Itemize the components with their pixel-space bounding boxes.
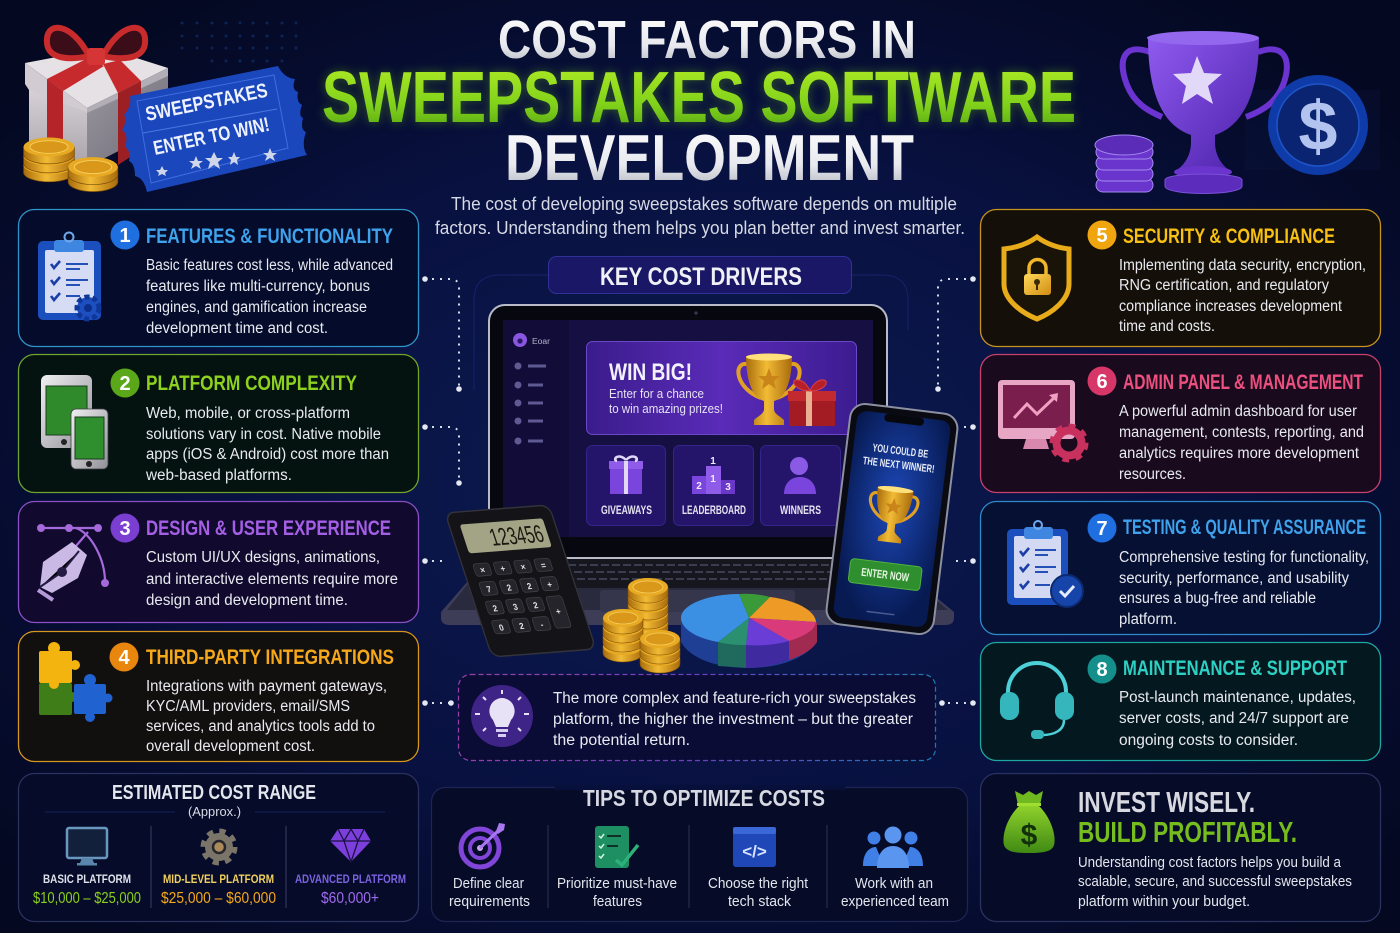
tier labels: $25,000 – $60,000 <box>161 890 276 907</box>
callout text: the potential return. <box>553 732 690 749</box>
panel: invest wisely <box>980 774 1380 922</box>
panel: third-party integrations <box>18 632 418 762</box>
heading: TIPS TO OPTIMIZE COSTS <box>583 785 825 811</box>
calculator: + <box>554 606 562 617</box>
text block: Basic features cost less, while advanced <box>146 257 393 274</box>
leaderboard tile: LEADERBOARD <box>682 505 746 517</box>
sidebar <box>513 333 550 444</box>
panel: estimated cost range: (Approx.) <box>188 804 241 819</box>
text block <box>1119 689 1356 749</box>
badge 8 <box>1088 654 1116 684</box>
tip labels: Prioritize must-have <box>557 876 677 892</box>
connectors <box>432 279 966 703</box>
text block <box>1119 403 1364 483</box>
text block: web-based platforms. <box>145 467 292 484</box>
calculator <box>445 505 596 657</box>
text block: Integrations with payment gateways, <box>146 678 387 695</box>
ticket: SWEEPSTAKES <box>144 80 270 126</box>
banner: to win amazing prizes! <box>609 402 723 416</box>
text block: Implementing data security, encryption, <box>1119 257 1366 274</box>
laptop base <box>441 557 954 625</box>
heading: key cost drivers: KEY COST DRIVERS <box>600 263 802 291</box>
tier labels: ADVANCED PLATFORM <box>295 874 406 886</box>
giveaways tile: GIVEAWAYS <box>601 505 652 517</box>
calculator: 2 <box>505 582 513 593</box>
icon: money bag <box>1003 791 1055 853</box>
text block: compliance increases development <box>1119 298 1343 315</box>
banner <box>586 342 856 434</box>
badge 1: 1 <box>119 225 131 247</box>
heading: PLATFORM COMPLEXITY <box>146 371 357 395</box>
panel: tips to optimize costs <box>432 785 968 922</box>
panel: maintenance and support <box>980 642 1380 760</box>
badge 6 <box>1088 366 1116 396</box>
title: DEVELOPMENT <box>505 121 914 194</box>
banner: WIN BIG! <box>609 359 692 386</box>
callout text <box>553 690 916 749</box>
panel: testing and quality assurance <box>980 502 1380 634</box>
icon: money bag: $ <box>1021 819 1038 852</box>
panel: security and compliance <box>980 210 1380 346</box>
icon: purple coin stack <box>1095 135 1153 192</box>
ticket: ENTER TO WIN! <box>151 114 271 160</box>
calculator: 2 <box>518 621 526 631</box>
badge 3 <box>110 514 140 542</box>
pie chart <box>681 594 817 668</box>
text block: server costs, and 24/7 support are <box>1119 710 1349 727</box>
icon: dollar coin <box>1268 75 1368 175</box>
title: COST FACTORS IN <box>498 10 916 70</box>
calculator: × <box>519 562 527 572</box>
ticket <box>122 66 307 192</box>
heading: FEATURES & FUNCTIONALITY <box>146 224 393 248</box>
tier labels: MID-LEVEL PLATFORM <box>163 874 274 886</box>
text block <box>1078 855 1352 910</box>
phone: THE NEXT WINNER! <box>862 455 935 476</box>
panel: admin panel and management <box>980 354 1380 492</box>
calculator: 7 <box>485 584 493 594</box>
tip labels: features <box>593 894 642 910</box>
badge 1 <box>110 220 140 250</box>
tier labels <box>33 874 406 907</box>
text block: platform. <box>1119 611 1177 628</box>
laptop <box>441 305 954 625</box>
badge 3: 3 <box>119 518 131 540</box>
icon: pen tool <box>37 524 109 600</box>
leaderboard tile <box>674 446 754 526</box>
badge 2: 2 <box>119 373 131 395</box>
badge 6: 6 <box>1096 371 1108 393</box>
calculator: 2 <box>491 603 499 614</box>
icon: checklist with check badge <box>1007 521 1083 607</box>
panel: design and user experience <box>18 502 418 622</box>
text block: Post-launch maintenance, updates, <box>1119 689 1356 706</box>
phone <box>825 402 959 636</box>
text block: solutions vary in cost. Native mobile <box>146 426 381 443</box>
text block: Custom UI/UX designs, animations, <box>146 549 380 566</box>
heading: INVEST WISELY. <box>1078 787 1255 819</box>
icon: phones <box>41 375 108 469</box>
tip labels: tech stack <box>728 894 792 910</box>
decorative dots and arcs <box>180 22 298 62</box>
icon: headset <box>1000 663 1074 739</box>
text block: engines, and gamification increase <box>146 299 367 316</box>
text block: Comprehensive testing for functionality, <box>1119 549 1369 566</box>
tip labels <box>449 876 949 910</box>
icon: gear <box>203 831 235 863</box>
title <box>322 10 1076 194</box>
banner: Enter for a chance <box>609 387 704 401</box>
text block <box>146 257 393 337</box>
icon: checklist <box>595 826 638 868</box>
text block: overall development cost. <box>146 738 315 755</box>
calculator: 2 <box>532 600 540 610</box>
calculator: + <box>546 579 554 590</box>
trophy illustration <box>1095 31 1368 194</box>
text block: development time and cost. <box>146 320 328 337</box>
tip labels: Choose the right <box>708 876 808 892</box>
badge 8: 8 <box>1096 659 1108 681</box>
text block <box>145 405 389 484</box>
heading: THIRD-PARTY INTEGRATIONS <box>146 645 394 669</box>
text block: resources. <box>1119 466 1186 483</box>
leaderboard tile: 3 <box>725 482 731 493</box>
winners tile <box>760 446 840 526</box>
badge 5: 5 <box>1096 225 1108 247</box>
text block: KYC/AML providers, email/SMS <box>146 698 350 715</box>
icon: people <box>863 826 923 868</box>
tier labels: $60,000+ <box>321 890 379 907</box>
icon: admin monitor with gear <box>998 380 1086 460</box>
text block <box>1119 257 1366 335</box>
calculator: 0 <box>497 622 505 633</box>
badge 4 <box>110 642 138 672</box>
panel: features and functionality <box>18 210 418 346</box>
text block: design and development time. <box>146 592 348 609</box>
badge 5 <box>1088 220 1116 250</box>
calculator: = <box>539 560 547 570</box>
calculator: 3 <box>511 602 519 612</box>
leaderboard tile: 1 <box>710 474 716 485</box>
panel: platform complexity <box>18 354 418 492</box>
icon: coin stack right <box>68 157 118 192</box>
text block: scalable, secure, and successful sweepstakes <box>1078 874 1352 890</box>
phone: YOU COULD BE <box>872 442 929 461</box>
icon: target <box>461 823 505 867</box>
heading: SECURITY & COMPLIANCE <box>1123 224 1335 248</box>
calculator: 123456 <box>486 521 548 552</box>
subtitle: factors. Understanding them helps you plan better and invest smarter. <box>435 218 965 238</box>
leaderboard tile: 2 <box>696 481 702 492</box>
text block: and interactive elements require more <box>146 571 398 588</box>
text block: platform within your budget. <box>1078 894 1250 910</box>
text block: A powerful admin dashboard for user <box>1119 403 1357 420</box>
text block: features like multi-currency, bonus <box>146 278 370 295</box>
laptop screen <box>489 305 887 558</box>
text block: services, and analytics tools add to <box>146 718 375 735</box>
tip labels: requirements <box>449 894 530 910</box>
subtitle: The cost of developing sweepstakes software depends on multiple <box>451 194 957 214</box>
sidebar: Eoar <box>532 337 550 346</box>
calculator: - <box>539 619 545 630</box>
giveaways tile <box>586 446 666 526</box>
text block: security, performance, and usability <box>1119 570 1349 587</box>
icon: light bulb <box>471 685 533 747</box>
tip labels: Work with an <box>855 876 933 892</box>
text block <box>146 549 398 609</box>
callout text: The more complex and feature-rich your sweepstakes <box>553 690 916 707</box>
text block: RNG certification, and regulatory <box>1119 277 1329 294</box>
icon: shield with lock <box>1004 237 1069 319</box>
text block <box>1119 549 1369 628</box>
calculator: + <box>499 563 507 574</box>
text block: Web, mobile, or cross-platform <box>146 405 350 422</box>
winners tile: WINNERS <box>780 505 821 517</box>
text block: management, contests, reporting, and <box>1119 424 1364 441</box>
text block <box>146 678 387 755</box>
text block: ongoing costs to consider. <box>1119 732 1298 749</box>
tier labels: $10,000 – $25,000 <box>33 890 141 907</box>
title: SWEEPSTAKES SOFTWARE <box>322 58 1076 138</box>
text block: apps (iOS & Android) cost more than <box>146 446 389 463</box>
icon: clipboard with gear <box>38 232 101 320</box>
phone: ENTER NOW <box>861 567 910 584</box>
badge 7 <box>1088 514 1116 542</box>
badge 4: 4 <box>118 647 130 669</box>
heading: DESIGN & USER EXPERIENCE <box>146 516 391 540</box>
connector dots <box>422 276 976 706</box>
panel: invest wisely: BUILD PROFITABLY. <box>1078 817 1297 849</box>
heading: ESTIMATED COST RANGE <box>112 782 316 804</box>
subtitle <box>435 194 965 238</box>
icon: gift <box>788 380 836 426</box>
icon: diamond <box>330 829 371 862</box>
icon: code window: </> <box>742 842 767 861</box>
text block: time and costs. <box>1119 318 1215 335</box>
badge 7: 7 <box>1096 518 1108 540</box>
icon: monitor <box>67 828 107 866</box>
coin stacks <box>603 578 680 673</box>
calculator: × <box>479 565 487 575</box>
icon: dollar coin: $ <box>1299 87 1337 165</box>
callout <box>458 674 936 760</box>
gift box illustration <box>24 28 168 192</box>
text block: analytics requires more development <box>1119 445 1360 462</box>
badge 2 <box>110 368 140 398</box>
tip labels: experienced team <box>841 894 949 910</box>
text block: Understanding cost factors helps you build a <box>1078 855 1342 871</box>
icon: coin stack left <box>24 138 74 182</box>
icon: code window <box>733 827 776 867</box>
heading: key cost drivers <box>548 256 852 294</box>
tip labels: Define clear <box>453 876 524 892</box>
callout text: platform, the higher the investment – but the greater <box>553 711 913 728</box>
panel: estimated cost range <box>18 774 418 922</box>
calculator: 2 <box>526 581 533 591</box>
tier labels: BASIC PLATFORM <box>43 874 131 886</box>
icon: puzzle pieces <box>39 642 112 722</box>
leaderboard tile: 1 <box>710 456 716 467</box>
text block: ensures a bug-free and reliable <box>1119 590 1316 607</box>
